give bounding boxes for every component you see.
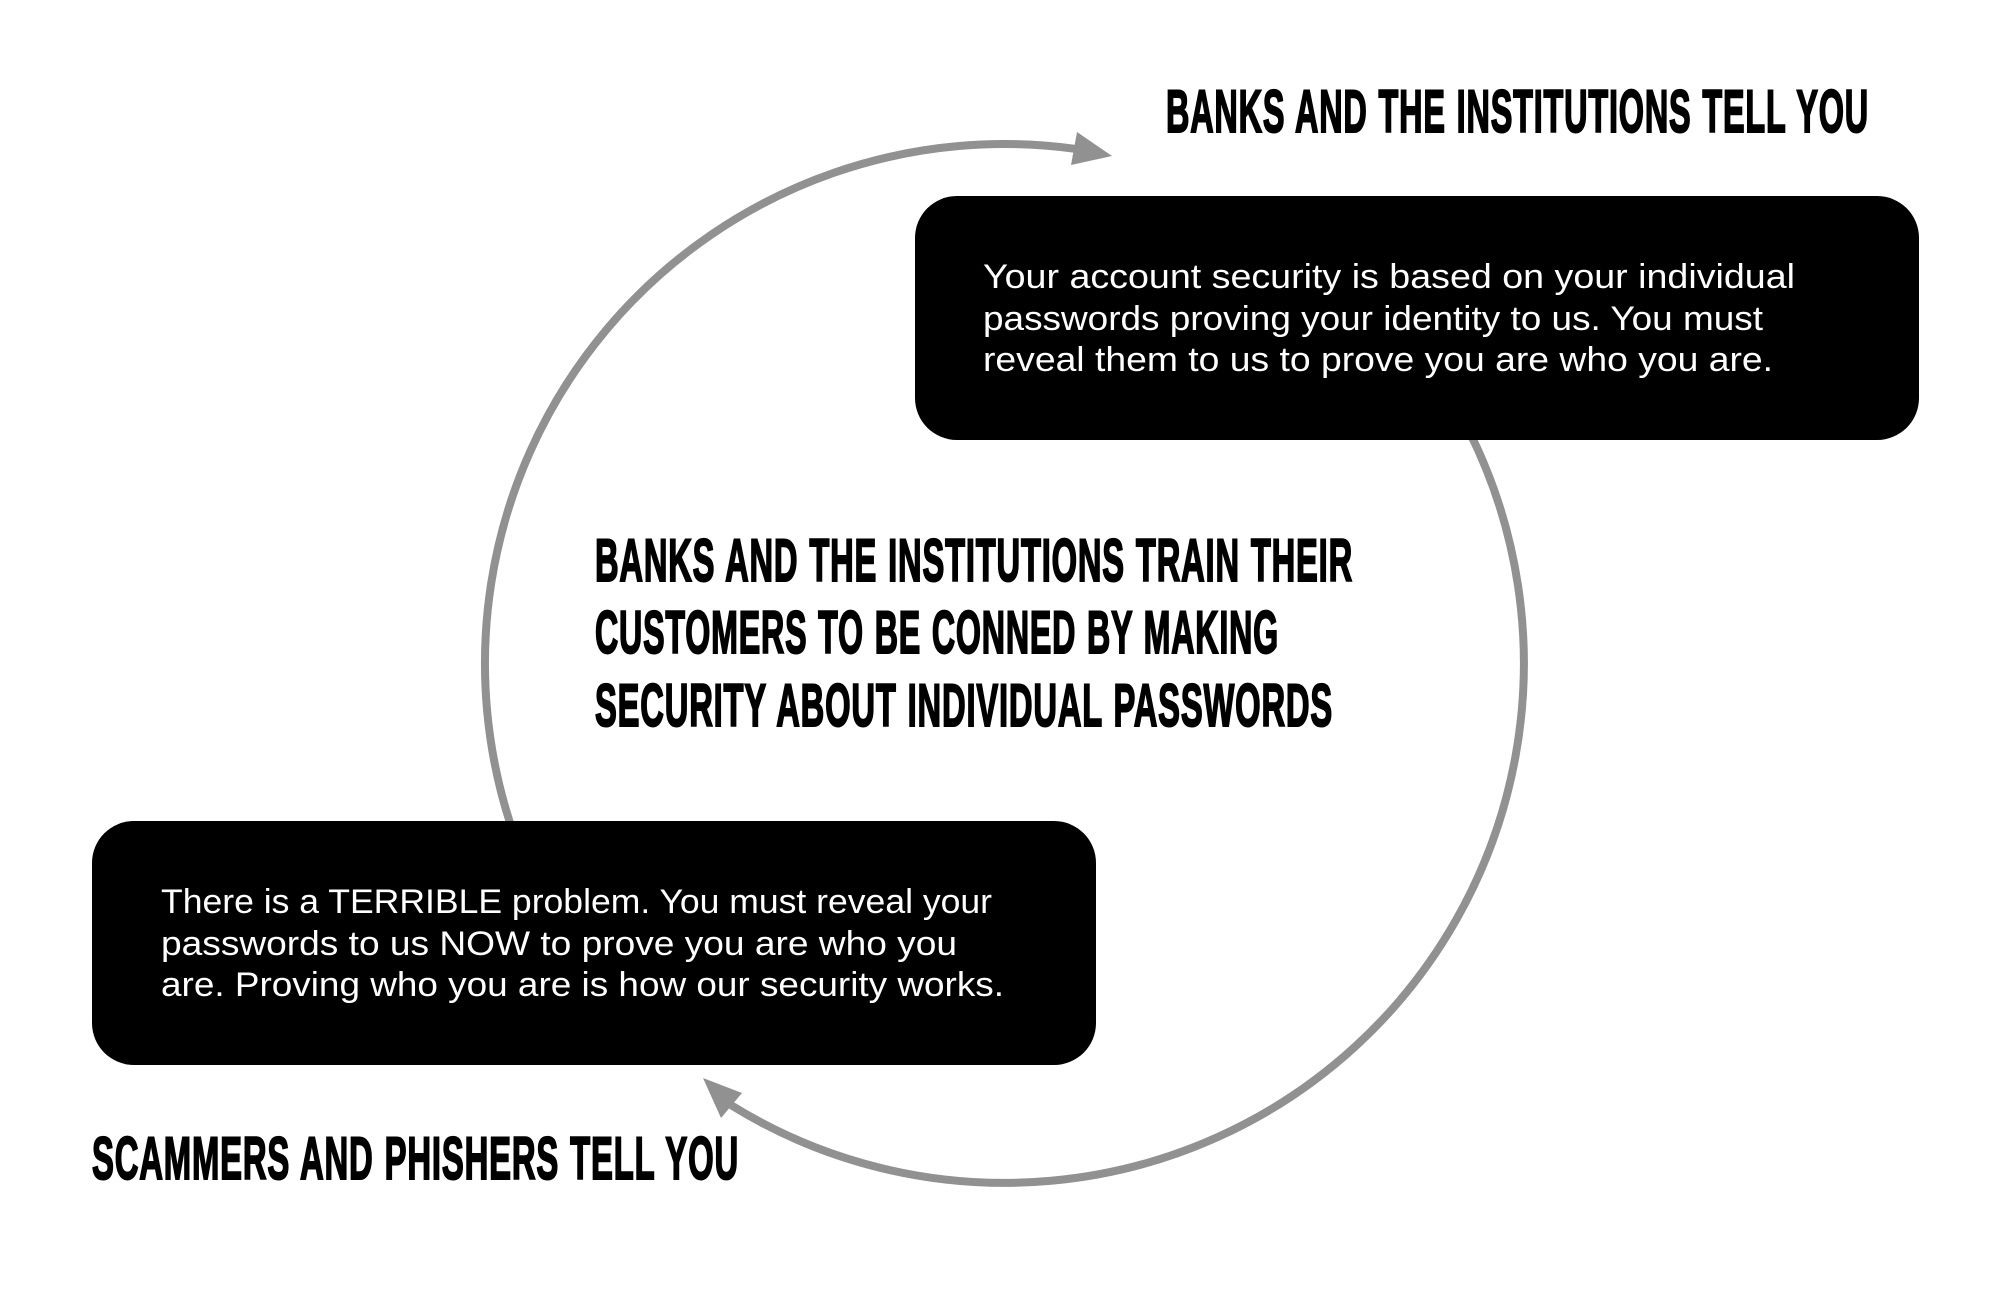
panel: scammers message — [92, 821, 1096, 1065]
text: banks message copy: Your account security is based on your individual — [983, 258, 1795, 296]
text: banks message copy — [983, 258, 1795, 379]
text: scammers message copy: There is a TERRIBLE problem. You must reveal your — [161, 883, 992, 921]
central statement — [595, 527, 1353, 739]
central statement: BANKS AND THE INSTITUTIONS TRAIN THEIR — [595, 527, 1353, 594]
arrow: from banks box down to scammers box — [703, 430, 1524, 1183]
panel: banks message — [915, 196, 1919, 440]
text: scammers message copy: are. Proving who you are is how our security works. — [161, 966, 1004, 1004]
arrow: from scammers box up to banks heading — [485, 132, 1112, 825]
text: banks message copy: passwords proving your identity to us. You must — [983, 300, 1764, 338]
heading: scammers and phishers tell you: SCAMMERS AND PHISHERS TELL YOU — [92, 1125, 739, 1192]
text: scammers message copy: passwords to us NOW to prove you are who you — [161, 925, 957, 963]
text: scammers message copy — [161, 883, 1004, 1004]
central statement: CUSTOMERS TO BE CONNED BY MAKING — [595, 599, 1279, 666]
central statement: SECURITY ABOUT INDIVIDUAL PASSWORDS — [595, 672, 1333, 739]
text: banks message copy: reveal them to us to prove you are who you are. — [983, 341, 1773, 379]
